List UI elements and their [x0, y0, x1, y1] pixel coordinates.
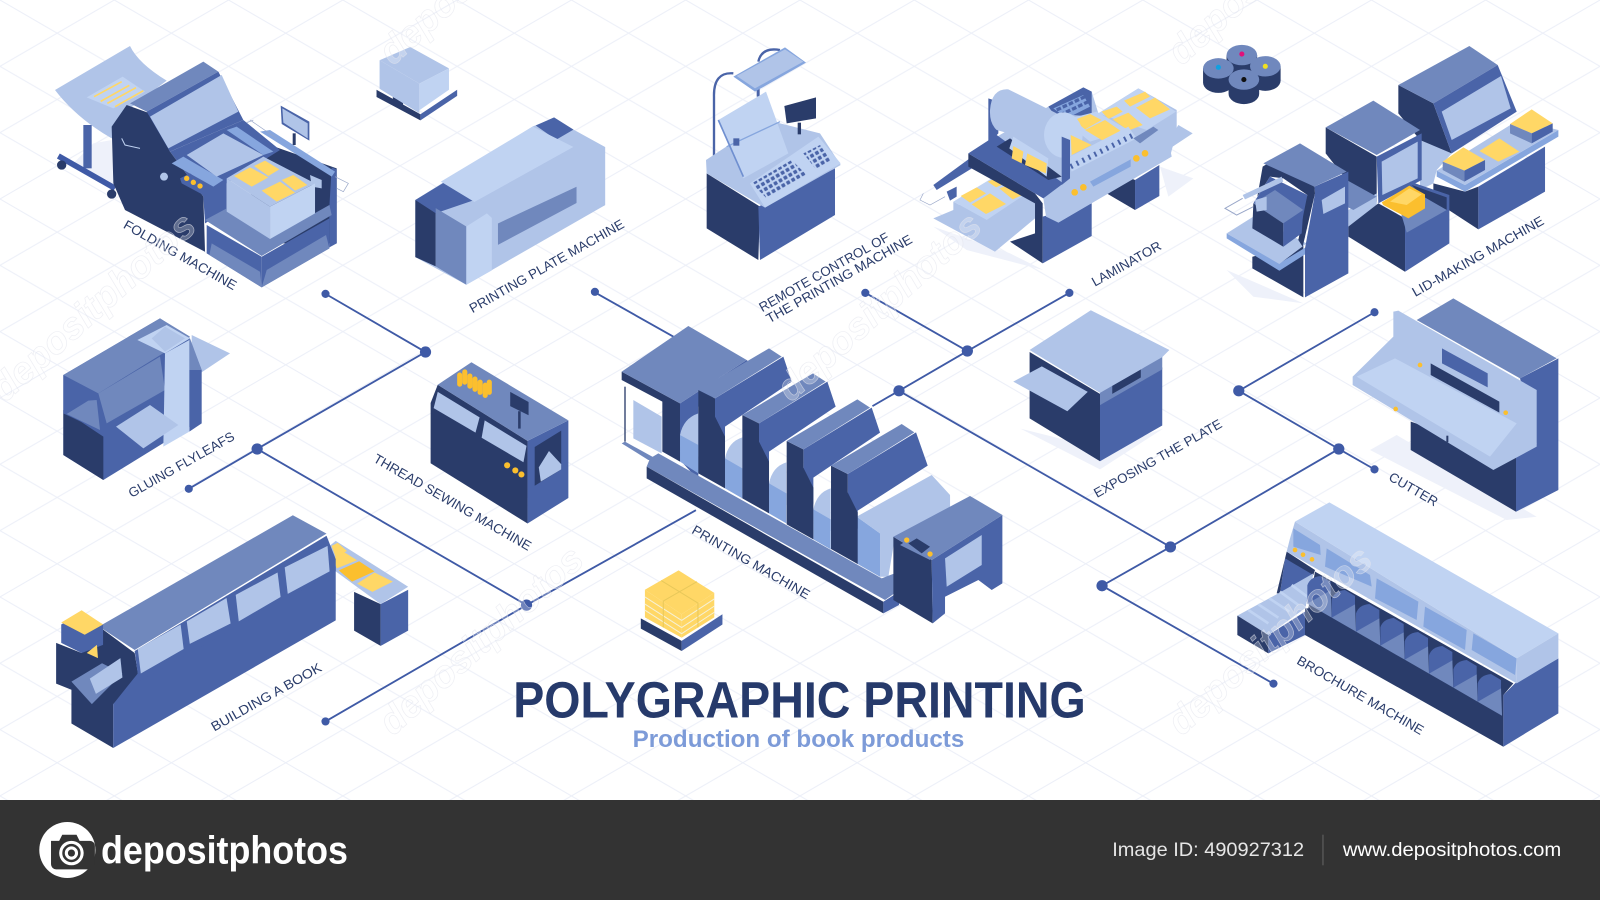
- machine: exposing the plate: [1013, 310, 1169, 469]
- watermarks: depositphotos: [768, 204, 989, 409]
- label: building a book: BUILDING A BOOK: [208, 660, 324, 734]
- watermarks: depositphotos: [370, 537, 591, 743]
- machine: thread sewing machine: [431, 362, 568, 523]
- machine: laminator: [920, 87, 1193, 270]
- label: brochure machine: BROCHURE MACHINE: [1294, 653, 1427, 738]
- printing unit 4: [787, 399, 880, 549]
- printing unit 1: [622, 326, 758, 480]
- watermarks: depositphotos: [1159, 537, 1380, 743]
- label: thread sewing machine: THREAD SEWING MACHINE: [371, 451, 534, 554]
- icon: pallet with paper stack: [377, 47, 457, 120]
- label: printing plate machine: PRINTING PLATE MACHINE: [467, 216, 627, 316]
- printing unit 2: [698, 348, 792, 498]
- label: cutter: CUTTER: [1386, 469, 1441, 509]
- delivery unit: [893, 496, 1002, 623]
- label: gluing flyleafs: GLUING FLYLEAFS: [126, 429, 237, 501]
- machine: gluing flyleafs: [63, 318, 230, 480]
- icon: ink rolls: [1203, 45, 1281, 104]
- machine: cutter: [1353, 298, 1558, 520]
- footer image id: Image ID: 490927312: [1112, 839, 1304, 861]
- footer brand: depositphotos: [101, 829, 348, 872]
- hood near delivery: [857, 475, 950, 577]
- printing unit 3: [742, 373, 836, 523]
- footer bar: [0, 800, 1600, 900]
- title: POLYGRAPHIC PRINTING: [513, 671, 1086, 728]
- printing unit 5: [831, 424, 928, 564]
- machine: remote control of the printing machine: [706, 47, 841, 260]
- footer logo icon: [39, 822, 95, 878]
- label: laminator: LAMINATOR: [1089, 238, 1164, 289]
- label: printing machine: PRINTING MACHINE: [689, 522, 813, 602]
- machine: folding machine: [55, 46, 348, 287]
- watermarks: [0, 0, 1380, 743]
- machine: brochure machine: [1237, 502, 1558, 747]
- label: remote control of the printing machine: REMOTE CONTROL OF: [756, 229, 892, 315]
- machine: printing machine: [622, 326, 1002, 623]
- label: folding machine: FOLDING MACHINE: [121, 217, 240, 293]
- pockets: [1307, 576, 1502, 716]
- footer url: www.depositphotos.com: [1342, 839, 1561, 861]
- machine: lid-making machine: [1225, 46, 1558, 303]
- connector lines flowchart: [185, 288, 1379, 726]
- label: lid-making machine: LID-MAKING MACHINE: [1409, 213, 1547, 300]
- subtitle: Production of book products: [633, 726, 964, 753]
- label: remote control of the printing machine: THE PRINTING MACHINE: [763, 232, 915, 326]
- machine: building a book: [56, 515, 408, 748]
- label: exposing the plate: EXPOSING THE PLATE: [1091, 416, 1225, 501]
- icon: pallet of books: [641, 570, 722, 651]
- machine: printing plate machine: [415, 117, 605, 285]
- stairs feeder: [1237, 573, 1313, 653]
